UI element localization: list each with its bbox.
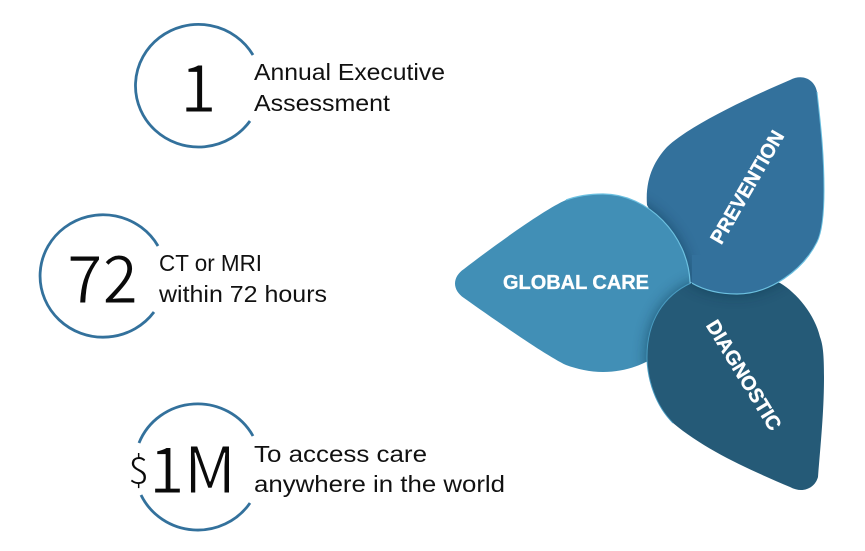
label: prevention: PREVENTION [707, 127, 789, 248]
number 72: 72 [67, 227, 138, 323]
number $1M: 1 [149, 420, 185, 512]
number $1M [128, 420, 236, 512]
number $1M: M [184, 420, 236, 512]
label: CT or MRI within 72 hours: within 72 hours [158, 281, 327, 307]
number 1: 1 [180, 36, 217, 132]
petal: diagnostic [646, 282, 824, 490]
label: annual executive assessment [254, 59, 445, 116]
diagram: three petals [455, 77, 824, 490]
label: annual executive assessment: Assessment [254, 90, 391, 116]
number $1M: $ [128, 440, 149, 495]
circle ring 3 [139, 404, 253, 530]
label: to access care anywhere in the world [254, 441, 505, 497]
label: global care: GLOBAL CARE [503, 272, 649, 294]
circle ring 2 [40, 215, 158, 337]
stat: $1M access to care [128, 404, 505, 530]
circle ring 1 [135, 24, 253, 147]
petal: prevention [646, 77, 824, 283]
label: CT or MRI within 72 hours: CT or MRI [159, 250, 262, 276]
label: annual executive assessment: Annual Executive [254, 59, 445, 85]
petal: global care [455, 193, 691, 372]
label: to access care anywhere in the world: To access care [254, 441, 427, 467]
label: diagnostic: DIAGNOSTIC [701, 316, 785, 435]
label: CT or MRI within 72 hours [158, 250, 327, 307]
stat: 72 CT or MRI [40, 215, 327, 337]
label: to access care anywhere in the world: anywhere in the world [254, 471, 505, 497]
stat: 1 annual executive assessment [135, 24, 445, 147]
prevention overlap over diagnostic [692, 255, 810, 295]
